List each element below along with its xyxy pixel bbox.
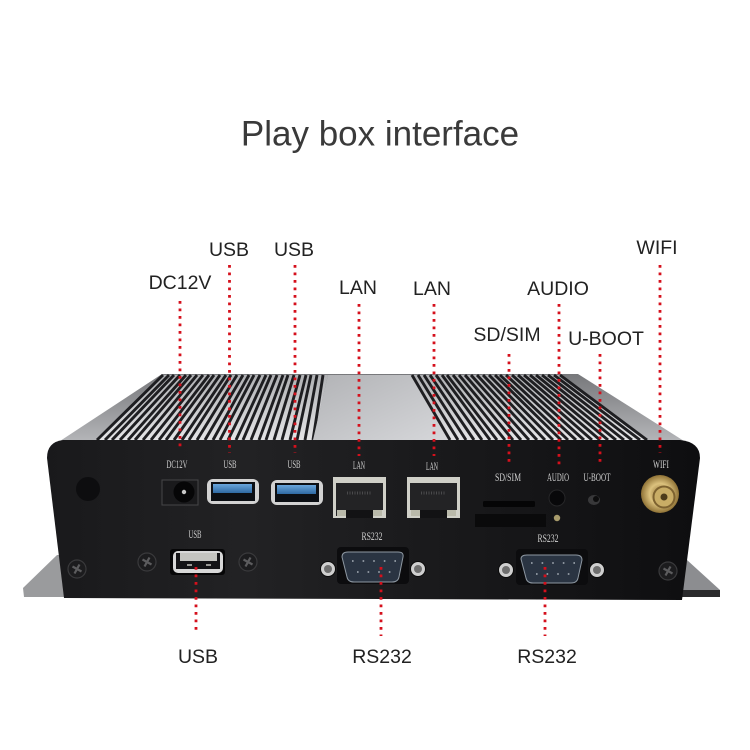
RS232 connector 2 xyxy=(498,531,604,585)
USB3 port 1 xyxy=(207,457,259,504)
panel hole xyxy=(76,477,100,501)
RS232 connector 1 xyxy=(320,529,426,584)
label: WIFI: WIFI xyxy=(653,457,669,471)
callout: SD/SIM: SD/SIM xyxy=(473,324,541,346)
left cooling fins xyxy=(97,375,328,440)
callout: RS232 bottom left xyxy=(352,567,412,668)
audio jack xyxy=(547,470,569,506)
USB3 port 2 xyxy=(271,457,323,505)
callout: LAN: LAN xyxy=(339,277,377,299)
callout: RS232 bottom right xyxy=(517,567,577,668)
label: DC12V: DC12V xyxy=(166,457,188,471)
callout: USB bottom: USB xyxy=(178,646,218,668)
label: USB: USB xyxy=(288,457,300,471)
left mounting flange xyxy=(23,555,70,597)
centre plate xyxy=(313,375,450,440)
callout: LAN: LAN xyxy=(413,278,451,300)
USB2 port xyxy=(170,527,225,575)
right cooling fins xyxy=(412,375,647,440)
right mounting flange xyxy=(680,560,720,597)
callout: U-BOOT: U-BOOT xyxy=(568,328,644,350)
LAN port 1: LAN xyxy=(353,458,365,472)
callout: DC12V: DC12V xyxy=(149,272,211,294)
callout: RS232 bottom right: RS232 xyxy=(517,646,577,668)
label: U-BOOT: U-BOOT xyxy=(584,470,611,484)
callout: USB bottom xyxy=(178,567,218,668)
callout: U-BOOT xyxy=(568,328,644,465)
U-BOOT button xyxy=(584,470,611,505)
callout: AUDIO: AUDIO xyxy=(527,278,589,300)
callout: USB: USB xyxy=(209,239,249,261)
title: Play box interface xyxy=(241,114,519,154)
LAN port 2 xyxy=(407,459,460,518)
DC12V jack xyxy=(162,457,198,505)
callout: USB: USB xyxy=(274,239,314,261)
WIFI antenna connector xyxy=(641,457,679,513)
label: SD/SIM: SD/SIM xyxy=(495,470,521,484)
label: USB: USB xyxy=(224,457,236,471)
label: USB: USB xyxy=(188,527,202,541)
label: AUDIO: AUDIO xyxy=(547,470,569,484)
SD/SIM slots xyxy=(475,470,560,527)
label: RS232: RS232 xyxy=(538,531,558,545)
front panel xyxy=(47,440,700,600)
LAN port 2: LAN xyxy=(426,459,438,473)
label: RS232: RS232 xyxy=(362,529,382,543)
callout: WIFI: WIFI xyxy=(636,237,678,259)
device: play box xyxy=(23,374,720,600)
screws xyxy=(68,553,677,580)
callout: RS232 bottom left: RS232 xyxy=(352,646,412,668)
top surface xyxy=(60,374,684,441)
LAN port 1 xyxy=(333,458,386,518)
